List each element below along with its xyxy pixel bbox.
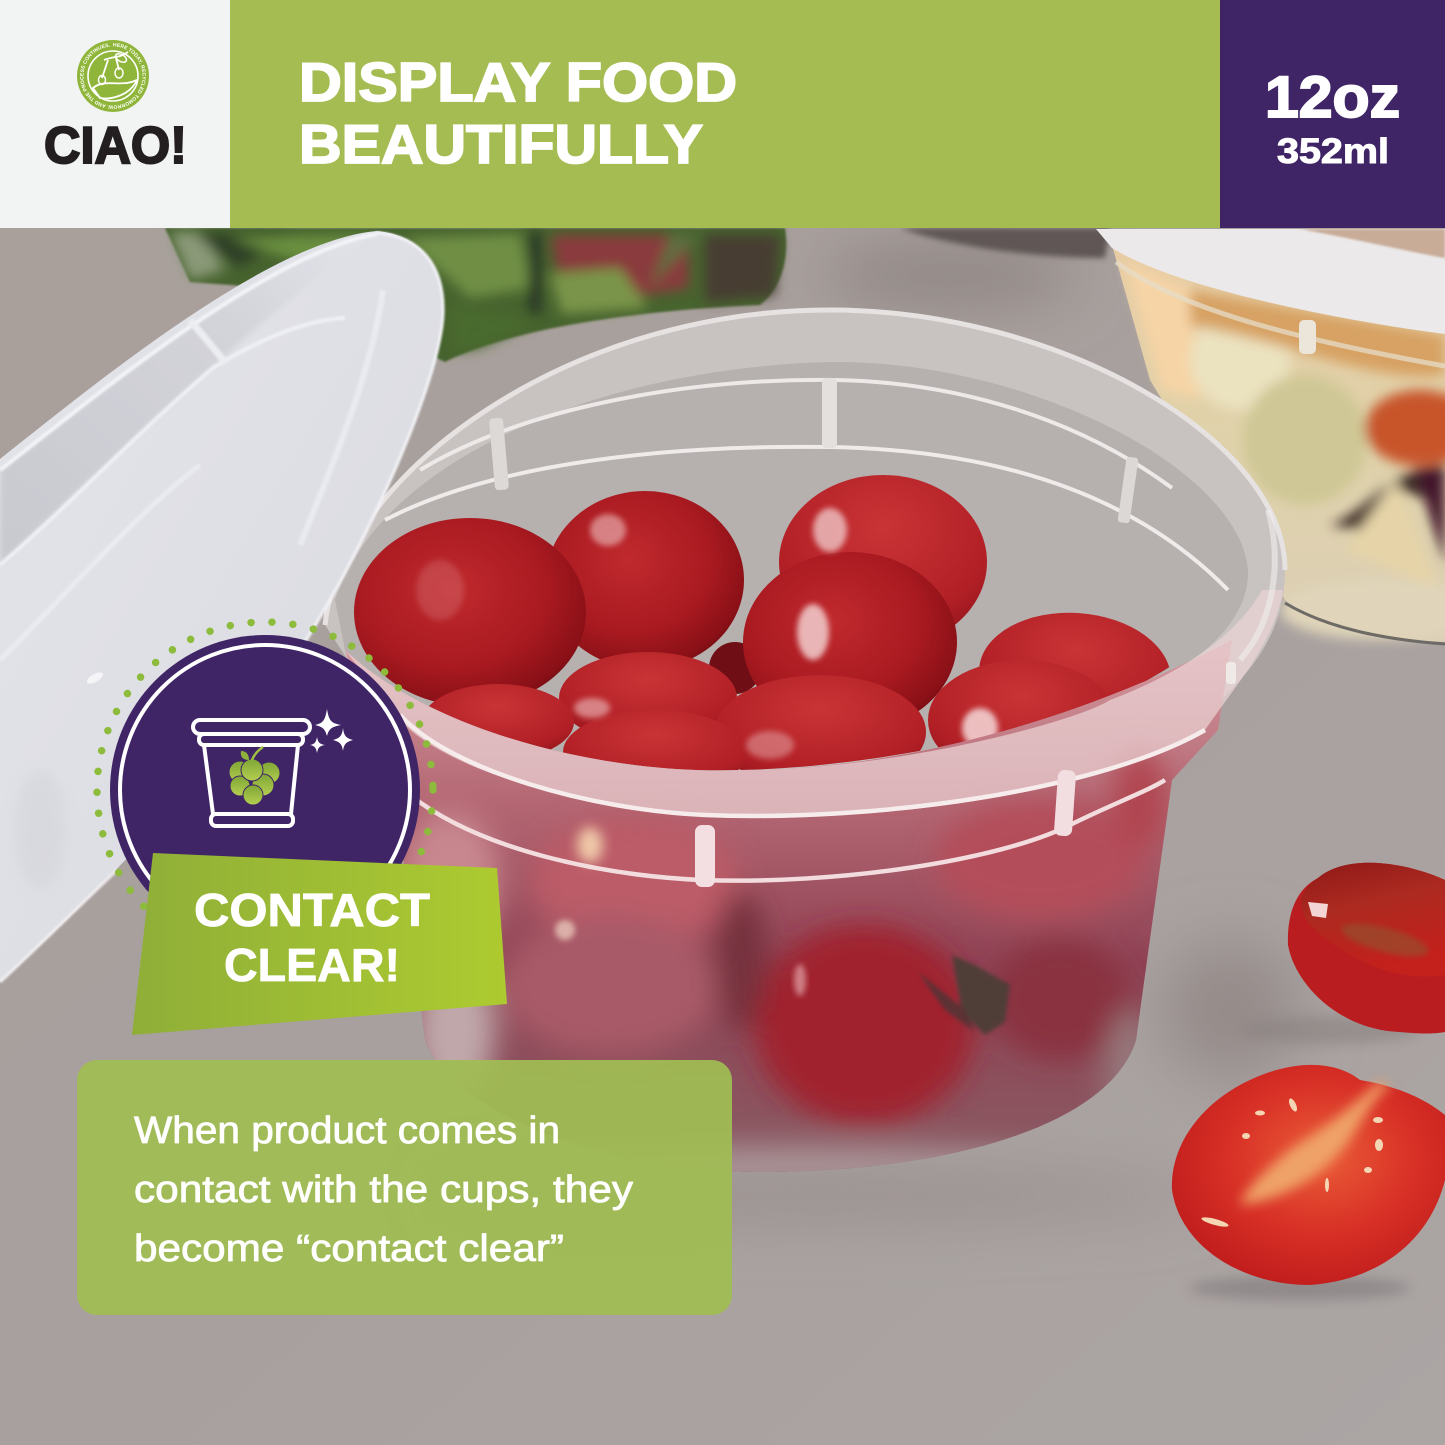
container front wall with frosted tomatoes	[340, 640, 1240, 1190]
back tomatoes	[779, 475, 987, 625]
logo emblem: HERE TODAY, RECYCLED TOMORROW. AND THE PROCESS CONTINUES.	[80, 43, 146, 109]
size text: 12oz	[1265, 65, 1400, 130]
text panel: contact clear description	[77, 1060, 732, 1315]
sparkles	[310, 709, 353, 753]
background salad bowl	[165, 228, 786, 362]
title band	[230, 0, 1220, 228]
size block	[1220, 0, 1445, 228]
banner text: CONTACT	[194, 884, 430, 936]
banner text	[194, 884, 430, 991]
size text	[1265, 65, 1400, 171]
cut tomato half, lower right	[1172, 1065, 1445, 1300]
tomato stem seen through wall	[918, 955, 1010, 1035]
grapes	[229, 759, 280, 805]
title	[299, 51, 737, 175]
counter shading	[440, 245, 1300, 1215]
lid outer grey band	[0, 242, 360, 565]
badge: contact clear	[97, 622, 507, 1035]
container front rim	[325, 310, 1285, 887]
cherry tomatoes inside container	[354, 475, 1175, 794]
panel background	[77, 1060, 732, 1315]
description text: When product comes in	[134, 1110, 560, 1152]
purple disc	[110, 635, 420, 945]
icon: deli cup with grapes and sparkles	[193, 709, 353, 826]
banner text: CLEAR!	[224, 939, 400, 991]
description text	[134, 1110, 633, 1270]
background container with food	[1096, 229, 1445, 644]
title: DISPLAY FOOD	[299, 51, 737, 113]
lid outline	[0, 231, 443, 982]
header bar	[0, 0, 1445, 228]
tomato highlights	[416, 508, 998, 759]
banner	[132, 853, 507, 1035]
photo: food containers and cherry tomatoes	[0, 228, 1445, 1302]
logo wordmark: CIAO!	[44, 117, 187, 175]
title: BEAUTIFULLY	[299, 113, 703, 175]
lid leaning on container	[0, 231, 443, 982]
description text: become “contact clear”	[134, 1228, 564, 1270]
logo block	[0, 0, 230, 228]
lid of background container	[1096, 229, 1445, 334]
size text: 352ml	[1277, 132, 1389, 171]
white ring	[120, 645, 410, 935]
cut tomato half, upper right	[1240, 863, 1445, 1044]
lid ridges	[0, 233, 443, 982]
main container interior	[325, 310, 1285, 810]
background dark object	[900, 228, 1110, 258]
dotted ring	[97, 622, 433, 958]
description text: contact with the cups, they	[134, 1169, 633, 1211]
